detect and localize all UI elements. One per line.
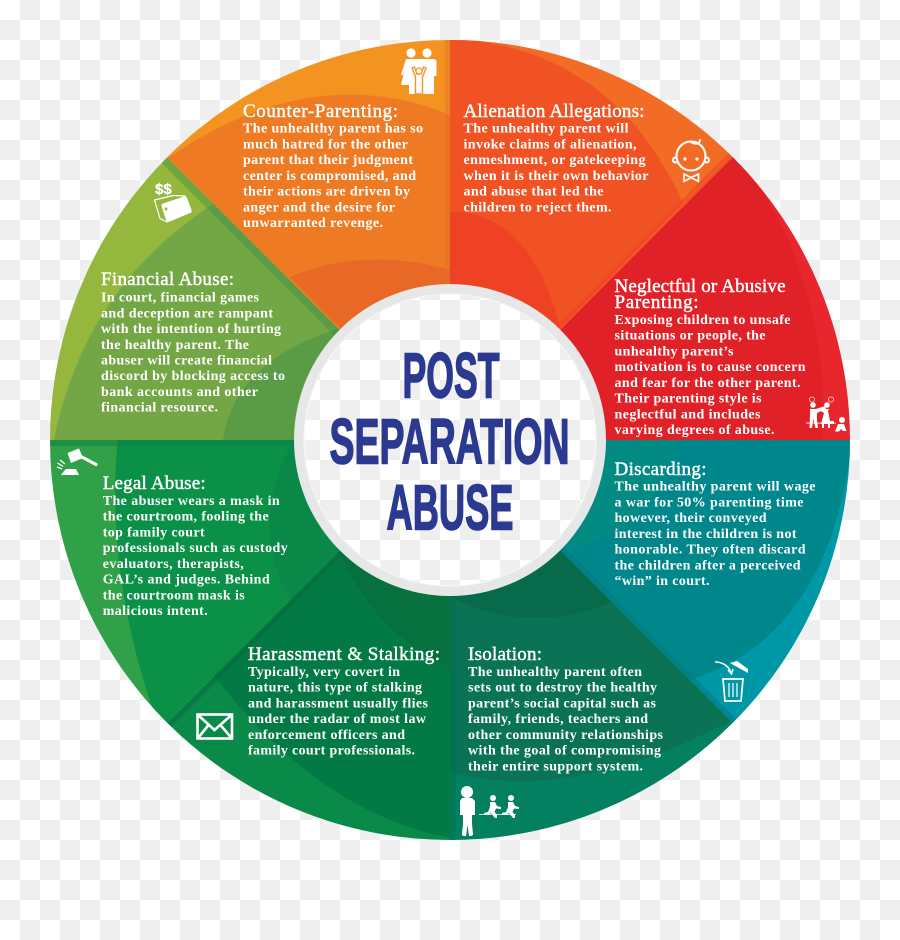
body: alienation allegations: The unhealthy parent will — [464, 122, 629, 137]
icon: money card — [154, 181, 192, 222]
icon: gavel — [57, 448, 96, 475]
icon: fighting parents and child — [806, 397, 846, 432]
body: isolation: other community relationships — [468, 728, 664, 743]
body: counter-parenting: The unhealthy parent has so — [243, 122, 423, 137]
body: financial abuse: financial resource. — [101, 400, 218, 415]
panel: financial abuse wedge — [50, 157, 340, 440]
body: alienation allegations — [464, 122, 648, 216]
title: ABUSE — [386, 472, 514, 544]
body: alienation allegations: and abuse that led the — [464, 185, 604, 200]
panel: alienation allegations wedge — [450, 40, 733, 330]
body: neglectful or abusive parenting: unhealthy parent’s — [614, 344, 734, 359]
body: isolation: parent’s social capital such as — [468, 696, 657, 711]
body: harassment and stalking: family court professionals. — [248, 744, 415, 759]
body: counter-parenting: their actions are driven by — [243, 185, 410, 200]
body: counter-parenting: much hatred for the other — [243, 137, 408, 152]
body: legal abuse: evaluators, therapists, — [103, 557, 244, 572]
text block: financial abuse — [101, 269, 285, 415]
body: alienation allegations: children to reject them. — [464, 200, 612, 216]
text block: discarding — [614, 459, 816, 589]
icon: money card: $$ — [155, 181, 172, 198]
body: financial abuse: bank accounts and other — [101, 385, 258, 400]
heading: discarding: Discarding: — [614, 459, 706, 480]
panel: counter-parenting wedge — [167, 40, 450, 330]
body: discarding: however, their conveyed — [614, 511, 767, 526]
body: financial abuse: In court, financial games — [101, 291, 260, 306]
center ring — [294, 284, 606, 596]
title — [330, 340, 570, 544]
heading: financial abuse: Financial Abuse: — [101, 269, 234, 290]
heading: neglectful or abusive parenting: Neglectful or Abusive — [614, 276, 786, 297]
body: discarding: honorable. They often discard — [614, 543, 806, 558]
text block: counter-parenting — [243, 101, 423, 231]
body: counter-parenting: center is compromised, and — [243, 169, 416, 184]
body: counter-parenting — [243, 122, 423, 231]
body: neglectful or abusive parenting — [614, 313, 806, 438]
text block: isolation — [468, 644, 664, 774]
body: neglectful or abusive parenting: situations or people, the — [614, 329, 766, 344]
body: neglectful or abusive parenting: and fear for the other parent. — [614, 376, 800, 391]
body: alienation allegations: enmeshment, or gatekeeping — [464, 153, 646, 168]
body: financial abuse: with the intention of hurting — [101, 322, 281, 337]
panel: discarding wedge — [560, 440, 850, 723]
body: financial abuse: the healthy parent. The — [101, 338, 249, 353]
icon: envelope — [198, 714, 232, 738]
body: harassment and stalking: under the radar of most law — [248, 712, 427, 727]
body: harassment and stalking: and harassment usually flies — [248, 696, 429, 711]
body: counter-parenting: anger and the desire for — [243, 200, 395, 216]
text block: harassment and stalking — [248, 644, 440, 759]
body: harassment and stalking: enforcement officers and — [248, 728, 405, 743]
body: counter-parenting: parent that their judgment — [243, 153, 413, 168]
body: neglectful or abusive parenting: neglectful and includes — [614, 407, 761, 422]
heading: alienation allegations: Alienation Allegations: — [464, 101, 644, 122]
body: discarding: a war for 50% parenting time — [614, 495, 804, 510]
panel: legal abuse wedge — [50, 440, 340, 723]
body: discarding: The unhealthy parent will wage — [614, 480, 816, 495]
body: financial abuse: discord by blocking access to — [101, 369, 285, 384]
body: neglectful or abusive parenting: motivation is to cause concern — [614, 360, 806, 375]
body: isolation: family, friends, teachers and — [468, 712, 648, 727]
panel: neglectful parenting wedge — [560, 157, 850, 440]
body: alienation allegations: invoke claims of alienation, — [464, 137, 636, 152]
body: alienation allegations: when it is their own behavior — [464, 169, 648, 184]
body: financial abuse — [101, 291, 285, 415]
body: legal abuse: the courtroom mask is — [103, 588, 245, 603]
body: financial abuse: abuser will create financial — [101, 354, 272, 368]
body: legal abuse: The abuser wears a mask in — [103, 494, 280, 509]
body: legal abuse: top family court — [103, 525, 205, 540]
heading: harassment and stalking: Harassment & Stalking: — [248, 644, 440, 665]
title: SEPARATION — [330, 406, 570, 478]
icon: family — [401, 48, 436, 94]
text block: neglectful or abusive parenting — [614, 276, 806, 438]
body: harassment and stalking: Typically, very covert in — [248, 665, 400, 680]
body: neglectful or abusive parenting: varying degrees of abuse. — [614, 423, 774, 438]
body: neglectful or abusive parenting: Their parenting style is — [614, 392, 762, 407]
body: harassment and stalking — [248, 665, 429, 759]
text block: alienation allegations — [464, 101, 648, 216]
body: discarding — [614, 480, 816, 589]
body: isolation: sets out to destroy the healthy — [468, 681, 657, 696]
body: discarding: interest in the children is not — [614, 527, 797, 542]
body: isolation: The unhealthy parent often — [468, 665, 642, 680]
heading: isolation: Isolation: — [468, 644, 542, 665]
body: harassment and stalking: nature, this type of stalking — [248, 681, 422, 696]
body: isolation — [468, 665, 664, 774]
panel: harassment wedge — [167, 550, 450, 840]
body: legal abuse: malicious intent. — [103, 604, 208, 619]
heading: neglectful or abusive parenting: Parenting: — [614, 292, 698, 313]
body: counter-parenting: unwarranted revenge. — [243, 216, 383, 231]
icon: isolated figure and running children — [460, 786, 519, 836]
panel: isolation wedge — [450, 550, 733, 840]
text block: legal abuse — [103, 473, 288, 619]
body: discarding: the children after a perceived — [614, 558, 801, 573]
body: legal abuse: GAL’s and judges. Behind — [103, 573, 270, 588]
heading: legal abuse: Legal Abuse: — [103, 473, 206, 494]
icon: trash can — [715, 661, 748, 701]
title: POST — [402, 340, 500, 412]
body: legal abuse — [103, 494, 288, 619]
body: legal abuse: the courtroom, fooling the — [103, 510, 269, 525]
body: neglectful or abusive parenting: Exposing children to unsafe — [614, 313, 790, 328]
body: isolation: their entire support system. — [468, 759, 643, 774]
center disc — [304, 294, 596, 586]
body: legal abuse: professionals such as custody — [103, 541, 288, 556]
body: isolation: with the goal of compromising — [468, 744, 661, 759]
body: financial abuse: and deception are rampant — [101, 306, 273, 321]
body: discarding: “win” in court. — [614, 574, 710, 589]
heading: neglectful or abusive parenting — [614, 276, 786, 313]
heading: counter-parenting: Counter-Parenting: — [243, 101, 398, 122]
icon: baby with bow tie — [673, 140, 709, 182]
